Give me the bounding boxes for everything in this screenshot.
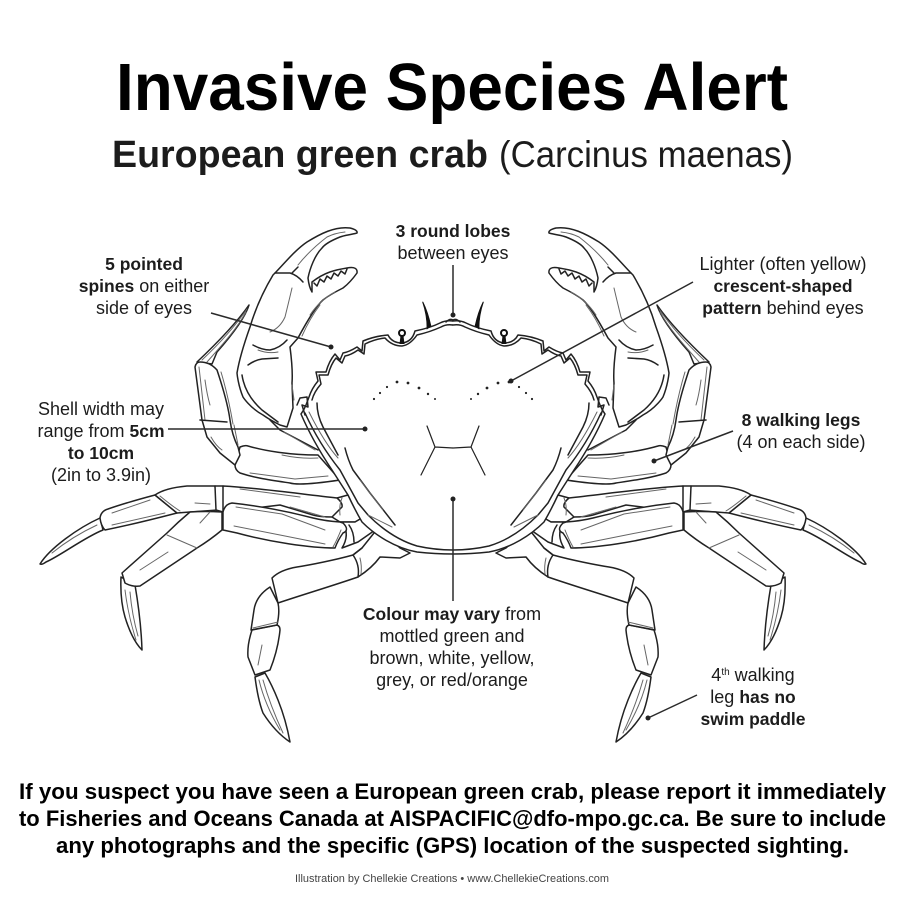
label: shell width: Shell width may — [38, 399, 164, 419]
crab right half (mirror) — [453, 228, 866, 742]
label: colour: grey, or red/orange — [376, 670, 528, 690]
walking leg 1 — [40, 486, 362, 564]
reporting instructions: If you suspect you have seen a European green crab, please report it immediately — [19, 779, 887, 804]
label: 4th walking leg: 4 — [711, 665, 721, 685]
eye — [399, 330, 405, 344]
reporting instructions: any photographs and the specific (GPS) location of the suspected sighting. — [56, 833, 849, 858]
carapace shell with spines — [297, 321, 453, 554]
claw arm segments — [195, 305, 340, 484]
shell groove marks — [421, 426, 453, 475]
label: 4th walking leg: swim paddle — [700, 709, 806, 729]
leader: shell width — [168, 426, 368, 432]
crab left half — [40, 228, 453, 742]
walking leg 2 — [121, 503, 378, 650]
subtitle: European green crab — [112, 134, 488, 176]
label: 4th walking leg — [646, 665, 806, 729]
credit: Illustration by Chellekie Creations • www.ChellekieCreations.com — [295, 873, 609, 885]
reporting instructions: to Fisheries and Oceans Canada at AISPACIFIC@dfo-mpo.gc.ca. Be sure to include — [19, 806, 886, 831]
label: 5 pointed spines: spines on either — [79, 276, 209, 296]
label: 8 walking legs: 8 walking legs — [742, 410, 861, 430]
leader: walking legs — [652, 431, 733, 464]
subtitle: (Carcinus maenas) — [499, 134, 793, 175]
leader: 4th leg — [646, 695, 697, 720]
label: 8 walking legs — [652, 410, 866, 464]
leader: colour — [450, 496, 456, 601]
leader: lobes — [450, 265, 456, 318]
label: crescent pattern — [508, 254, 867, 384]
leader: spines — [211, 313, 334, 350]
label: 3 round lobes — [396, 221, 511, 318]
label: colour — [363, 496, 541, 690]
label: crescent pattern: pattern behind eyes — [702, 298, 864, 318]
label: shell width: to 10cm — [68, 443, 134, 463]
centre front lobes — [446, 319, 460, 322]
label: 3 round lobes: between eyes — [397, 243, 509, 263]
crab illustration — [40, 228, 866, 742]
label: crescent pattern: crescent-shaped — [713, 276, 853, 296]
label: crescent pattern: Lighter (often yellow) — [699, 254, 867, 274]
label: 5 pointed spines: side of eyes — [96, 298, 192, 318]
label: colour: Colour may vary from — [363, 604, 541, 624]
leader: crescent — [508, 282, 693, 384]
crescent-shaped dots — [373, 381, 436, 400]
claw — [237, 228, 357, 450]
reporting instructions — [19, 779, 887, 858]
label: 3 round lobes: 3 round lobes — [396, 221, 511, 241]
label: 4th walking leg: th — [721, 667, 730, 678]
label: shell width: (2in to 3.9in) — [51, 465, 151, 485]
label: 4th walking leg: walking — [730, 665, 795, 685]
title: Invasive Species Alert — [116, 50, 788, 125]
subtitle — [112, 134, 793, 176]
walking leg 3, fourth with no swim paddle — [248, 528, 410, 742]
label: 8 walking legs: (4 on each side) — [736, 432, 866, 452]
label: colour: mottled green and — [379, 626, 525, 646]
label: 5 pointed spines — [79, 254, 334, 350]
label: shell width: range from 5cm — [37, 421, 165, 441]
label: 5 pointed spines: 5 pointed — [105, 254, 183, 274]
label: 4th walking leg: leg has no — [710, 687, 796, 707]
label: colour: brown, white, yellow, — [369, 648, 535, 668]
label: shell width — [37, 399, 368, 485]
antenna — [422, 302, 431, 329]
